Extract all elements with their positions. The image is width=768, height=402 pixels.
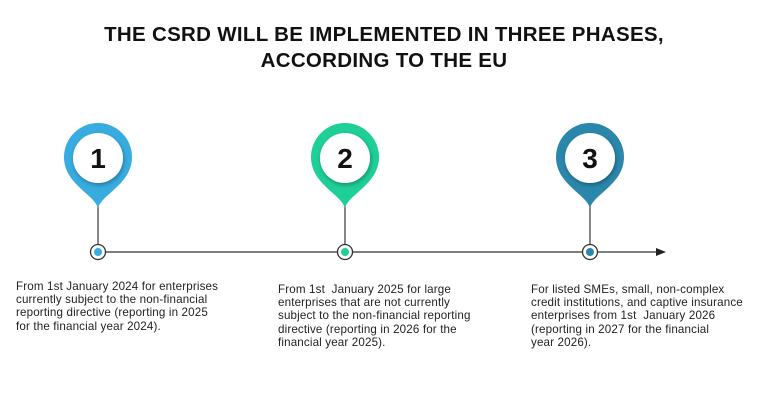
text: phase 3	[531, 283, 743, 349]
text: phase 3: enterprises from 1st January 2026	[531, 309, 715, 322]
text: phase 1: for the financial year 2024).	[16, 320, 161, 333]
pin 1: 1	[90, 143, 106, 174]
text: phase 1: From 1st January 2024 for enterprises	[16, 280, 218, 293]
pin 3: 3	[582, 143, 598, 174]
text: phase 3: year 2026).	[531, 336, 591, 349]
text: phase 2: directive (reporting in 2026 for the	[278, 323, 457, 336]
text: phase 3: For listed SMEs, small, non-complex	[531, 283, 724, 296]
title	[104, 23, 664, 72]
pin 3	[556, 123, 624, 260]
text: phase 1	[16, 280, 218, 333]
pin 2: 2	[337, 143, 353, 174]
text: phase 3: (reporting in 2027 for the financial	[531, 323, 709, 336]
text: phase 3: credit institutions, and captive insurance	[531, 296, 743, 309]
pin 1	[64, 123, 132, 260]
text: phase 1: reporting directive (reporting in 2025	[16, 306, 208, 319]
title: THE CSRD WILL BE IMPLEMENTED IN THREE PHASES,	[104, 23, 664, 46]
title: ACCORDING TO THE EU	[261, 49, 507, 72]
text: phase 2: financial year 2025).	[278, 336, 386, 349]
text: phase 2: From 1st January 2025 for large	[278, 283, 451, 296]
text: phase 2: enterprises that are not currently	[278, 296, 450, 309]
text: phase 1: currently subject to the non-financial	[16, 293, 207, 306]
text: phase 2	[278, 283, 471, 349]
timeline arrow	[106, 248, 666, 256]
text: phase 2: subject to the non-financial reporting	[278, 309, 471, 322]
pin 2	[311, 123, 379, 260]
